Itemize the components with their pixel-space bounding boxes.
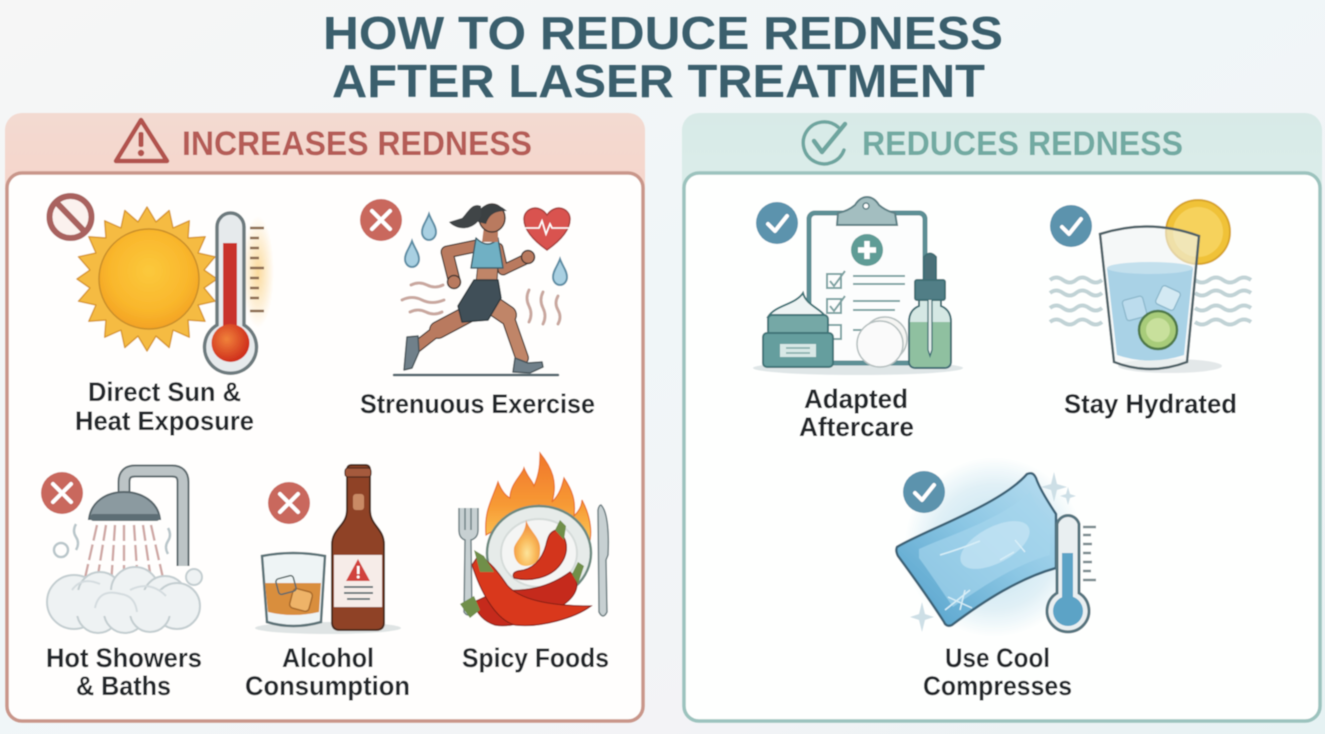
panel body [7,173,643,721]
item: strenuous exercise [360,199,595,419]
icon: check circle [803,122,845,164]
label: Adapted [804,384,908,414]
icon: hot thermometer [204,213,274,373]
icon: cotton pads [857,317,907,367]
icon: small flame [514,520,540,566]
icon: shadow [1118,359,1222,373]
item: direct sun and heat exposure [50,196,274,436]
label [75,377,254,436]
icon: x badge [360,199,402,241]
icon: dropper bottle [909,254,951,368]
item: adapted aftercare [753,197,963,442]
icon: plate [487,506,591,600]
label: Spicy Foods [462,643,609,673]
icon: shower head [89,471,183,566]
item: stay hydrated [1050,200,1251,419]
icon: x badge [41,472,83,514]
icon: clipboard [809,197,925,363]
label: Aftercare [799,412,914,442]
icon: sweat drops [405,214,567,285]
label: Hot Showers [46,643,202,673]
panel: reduces redness [682,113,1322,721]
label: Consumption [245,671,410,701]
icon: water waves [1050,278,1251,324]
icon: shadow [255,622,401,634]
icon: glass of water [1100,226,1199,369]
icon: runner [394,204,558,375]
label [245,643,410,701]
panel: increases redness [5,113,645,721]
label: Compresses [923,671,1072,701]
label [799,384,914,442]
icon: whisky glass [262,553,325,626]
label [923,643,1072,701]
icon: shadow [753,361,963,375]
label [46,643,202,701]
icon: prohibition sign [50,196,92,238]
icon: cold glow [904,457,1084,637]
icon: chili peppers [460,520,591,626]
label: Use Cool [945,643,1050,673]
icon: fork [459,508,478,615]
label: Heat Exposure [75,406,254,436]
icon: cream jar [763,293,833,367]
icon: heat waves [402,283,560,324]
icon: check badge [1050,205,1092,247]
icon: beer bottle [332,465,384,630]
icon: water spray [80,525,168,600]
title: AFTER LASER TREATMENT [332,55,985,107]
icon: check badge [756,202,798,244]
label: Strenuous Exercise [360,389,595,419]
icon: sparkles [910,472,1076,632]
icon: cold thermometer [1047,516,1096,632]
icon: steam cloud [47,567,202,633]
item: use cool compresses [896,457,1096,701]
icon: ice pack [896,473,1056,626]
icon: knife [598,505,608,616]
heading: reduces redness: REDUCES REDNESS [862,125,1183,163]
label: & Baths [76,671,171,701]
heading: increases redness: INCREASES REDNESS [182,125,532,163]
icon: flames [486,453,591,540]
label: Direct Sun & [88,377,241,407]
icon: warning triangle [116,120,167,161]
title [323,7,1003,107]
icon: x badge [268,482,310,524]
icon: steam squiggles [54,524,170,557]
icon: heart [524,208,570,250]
icon: lemon slice [1166,200,1230,264]
item: alcohol consumption [245,465,410,701]
panel body [684,173,1320,721]
panel header background [682,113,1322,203]
item: spicy foods [459,453,609,673]
item: hot showers and baths [41,471,202,701]
label: Stay Hydrated [1064,389,1237,419]
title: HOW TO REDUCE REDNESS [323,7,1003,59]
icon: sun [77,207,217,351]
panel header background [5,113,645,203]
label: Alcohol [282,643,374,673]
icon: check badge [903,471,945,513]
